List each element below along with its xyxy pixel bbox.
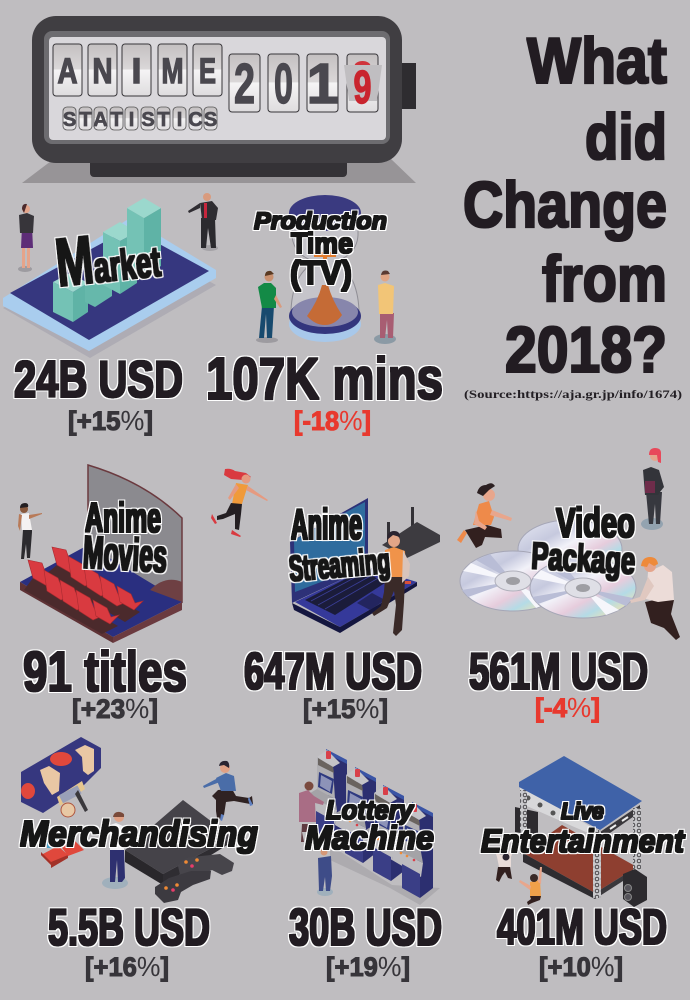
heading: What did Change from 2018?: What (527, 24, 667, 97)
flip word: STATISTICS (63, 107, 217, 131)
label: Video Package: Package (530, 535, 636, 583)
flip year: 2019: 9 (354, 61, 372, 113)
flip word: STATISTICS: T (110, 109, 123, 131)
flip word: STATISTICS: I (177, 109, 182, 131)
figure: woman pointing (18, 503, 42, 559)
panel: video package (457, 448, 680, 723)
change: -18%: [-18%] (294, 405, 371, 436)
change: +23%: [+23%] (72, 693, 158, 724)
flip word: STATISTICS: I (129, 109, 134, 131)
illustration: cinema (18, 465, 182, 643)
flip year: 2019 (229, 52, 382, 116)
label: Lottery Machine: Lottery (326, 795, 415, 825)
panel: market (3, 193, 218, 436)
illustration: laptop (290, 498, 440, 636)
flip word: ANIME (53, 44, 222, 96)
panel: lottery machine (289, 749, 442, 982)
label: Lottery Machine (305, 795, 434, 856)
flip word: ANIME: I (132, 52, 141, 91)
figure: kneeling woman (457, 483, 512, 548)
figure: woman in suit (641, 448, 664, 530)
figure: man leaning (372, 531, 410, 636)
flip word: STATISTICS: S (141, 109, 155, 131)
flip year: 2019: 1 (307, 52, 338, 116)
label: Video Package: Video (556, 499, 635, 546)
change: +15%: [+15%] (303, 693, 388, 724)
figure: man in green (256, 271, 282, 343)
figure: man at machine (299, 782, 324, 842)
flip word: ANIME: N (92, 52, 112, 91)
panel: production time (206, 195, 443, 436)
label: Lottery Machine: Machine (305, 819, 434, 856)
flip year: 2019: 2 (234, 52, 255, 116)
panel: merchandising (20, 737, 258, 982)
heading: What did Change from 2018?: did (585, 100, 667, 173)
seat row bases (45, 565, 140, 622)
flip word: STATISTICS: T (157, 109, 170, 131)
source note: (Source:https://aja.gr.jp/info/1674) (464, 389, 682, 401)
flip word: STATISTICS: T (79, 109, 92, 131)
figure: crouching man (630, 557, 680, 640)
label: Live Entertainment: Entertainment (481, 823, 685, 859)
heading: What did Change from 2018?: 2018? (505, 313, 667, 386)
value: 30B USD: 30B USD (289, 899, 442, 957)
figure: running man (203, 761, 253, 821)
console (125, 800, 232, 874)
flip year: 2019: 0 (274, 52, 293, 116)
heading: What did Change from 2018? (463, 24, 667, 386)
flip word: STATISTICS: S (63, 109, 76, 131)
flip word: STATISTICS: S (204, 109, 217, 131)
figure: dancer in white (494, 844, 515, 882)
value: 107K mins: 107K mins (206, 346, 443, 412)
flip word: ANIME: M (162, 52, 184, 91)
illustration: hourglass (256, 195, 396, 344)
label: Anime Streaming (287, 500, 392, 589)
illustration: discs (457, 448, 680, 640)
flip word: STATISTICS: A (93, 109, 108, 131)
label: Anime Movies (82, 494, 168, 582)
panel: live entertainment (481, 756, 685, 982)
label: Anime Movies: Movies (82, 526, 168, 582)
label: Anime Movies: Anime (85, 494, 161, 541)
illustration: stage (494, 756, 647, 907)
figure: running woman (211, 469, 268, 537)
label: Production Time (TV) (254, 208, 387, 291)
figure: dancer in orange (519, 867, 542, 905)
router (382, 507, 440, 558)
label: Anime Streaming: Anime (291, 500, 362, 549)
figure: woman on disc (102, 812, 128, 889)
label: Live Entertainment (481, 798, 685, 859)
illustration: machines (299, 749, 440, 905)
value: 24B USD: 24B USD (14, 351, 183, 409)
flip word: ANIME: A (58, 52, 78, 91)
illustration: phone with bars (3, 193, 218, 358)
panel: anime movies (18, 465, 268, 724)
change: +19%: [+19%] (326, 951, 410, 982)
value: 91 titles: 91 titles (23, 640, 187, 704)
panel: anime streaming (244, 498, 440, 724)
value: 647M USD: 647M USD (244, 643, 422, 701)
change: -4%: [-4%] (535, 692, 600, 723)
label: Live Entertainment: Live (561, 798, 604, 824)
label: Production Time (TV): Time (291, 228, 353, 260)
label: Market: Market (52, 214, 163, 301)
flip word: STATISTICS: C (188, 109, 203, 131)
figure: police officer (317, 848, 333, 896)
seats (28, 547, 143, 624)
illustration: slot machine and console (21, 737, 253, 903)
figure: woman (18, 204, 34, 272)
change: +15%: [+15%] (68, 405, 153, 436)
heading: What did Change from 2018?: from (542, 242, 667, 315)
flip clock header (22, 16, 416, 183)
label: Anime Streaming: Streaming (287, 540, 392, 589)
figure: man in suit (188, 193, 218, 251)
change: +10%: [+10%] (539, 951, 623, 982)
label: Video Package (530, 499, 636, 583)
label: Production Time (TV): (TV) (290, 254, 352, 291)
label: Merchandising: Merchandising (20, 813, 258, 854)
change: +16%: [+16%] (85, 951, 169, 982)
value: 5.5B USD: 5.5B USD (48, 899, 210, 957)
figure: man in yellow (374, 270, 396, 344)
label: Production Time (TV): Production (254, 208, 387, 235)
flip word: ANIME: E (199, 52, 216, 91)
